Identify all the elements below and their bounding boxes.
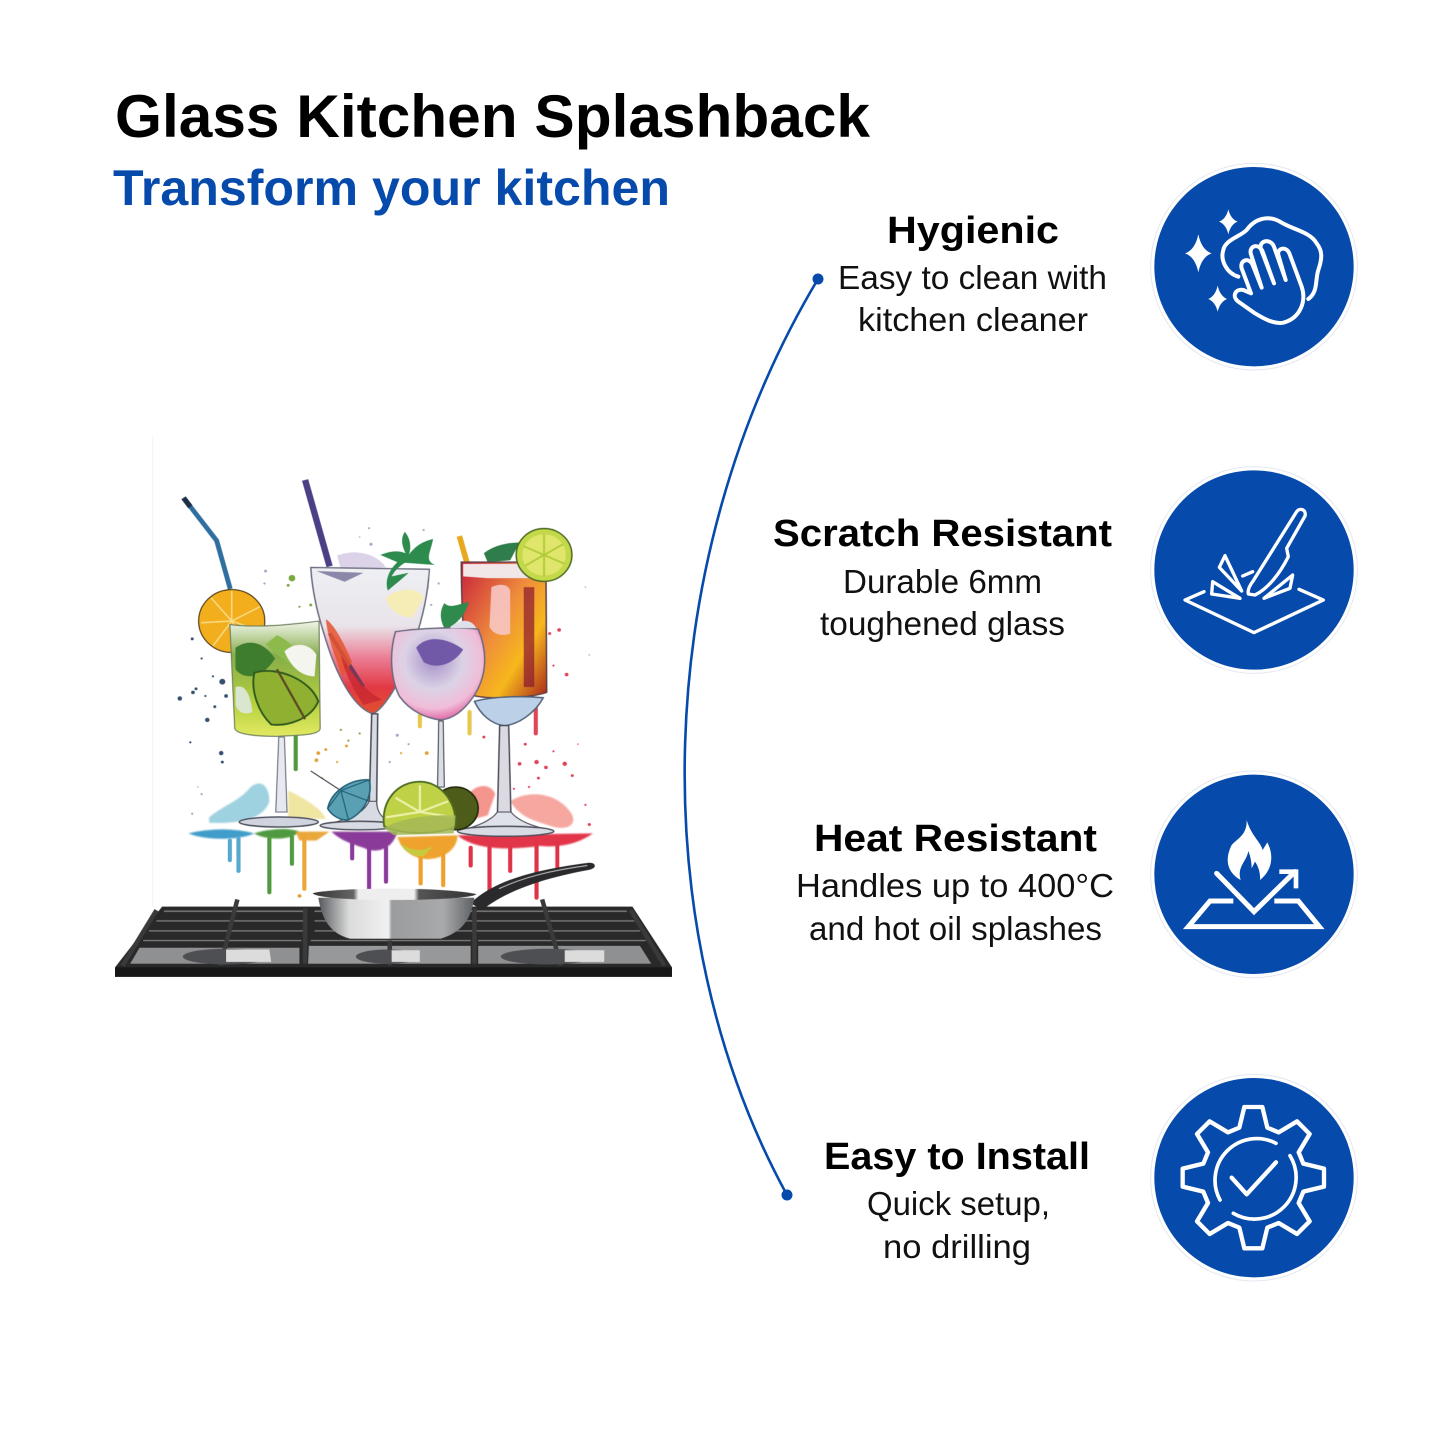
gas hob: [115, 899, 672, 977]
colour drips: [230, 705, 557, 899]
icon: knife scratching a glass surface: [1151, 467, 1357, 673]
feature: scratch resistant: [773, 513, 1112, 642]
cocktail umbrella: [311, 771, 370, 820]
lime slices: [384, 782, 478, 857]
product illustration: cocktail splashback above a gas hob: [115, 437, 672, 977]
feature: hygienic: [838, 210, 1107, 338]
icon: flame over heat-reflecting surface: [1151, 771, 1357, 978]
heading: Hygienic: [887, 210, 1059, 252]
description: kitchen cleaner: [858, 301, 1088, 338]
feature: easy to install: [824, 1136, 1090, 1265]
description: Durable 6mm: [843, 563, 1042, 600]
description: no drilling: [883, 1228, 1031, 1265]
tall highball stem glass with citrus: [457, 529, 572, 836]
subtitle: Transform your kitchen: [113, 160, 670, 216]
paint splatter dots: [178, 527, 591, 898]
icon: wiping hand with sparkles: [1151, 163, 1357, 370]
curved connector line with end dots: [685, 274, 824, 1200]
heading: Easy to Install: [824, 1136, 1090, 1178]
icon: gear with check mark: [1151, 1074, 1357, 1281]
description: toughened glass: [820, 605, 1065, 642]
left tumbler glass: [184, 498, 320, 827]
title: Glass Kitchen Splashback: [115, 83, 871, 150]
description: Handles up to 400°C: [796, 867, 1114, 904]
description: Easy to clean with: [838, 259, 1107, 296]
mint garnish on coupe: [380, 532, 435, 591]
heading: Heat Resistant: [814, 818, 1097, 860]
balloon gin glass: [392, 602, 485, 787]
feature: heat resistant: [796, 818, 1114, 947]
watercolour splashes: [188, 783, 593, 859]
frying pan: [313, 863, 595, 939]
heading: Scratch Resistant: [773, 513, 1112, 555]
description: Quick setup,: [867, 1185, 1050, 1222]
description: and hot oil splashes: [809, 910, 1102, 947]
tall coupe glass with purple straw: [305, 480, 429, 830]
glass panel edge: [151, 437, 154, 907]
